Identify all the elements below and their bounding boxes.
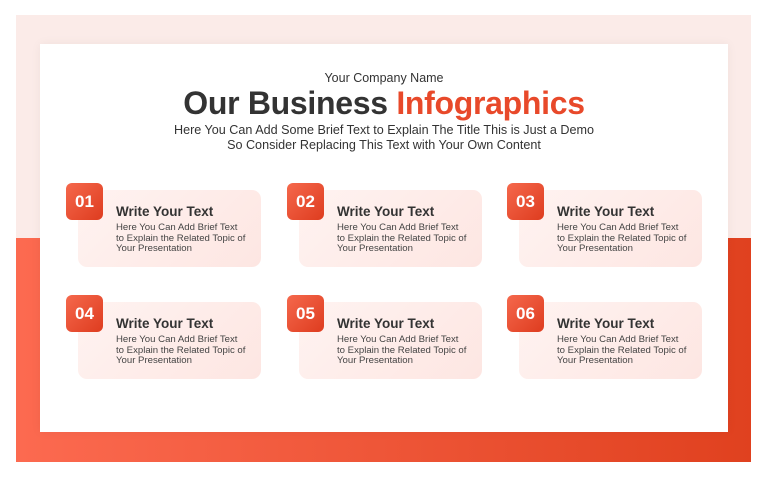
card 05: Here You Can Add Brief Text xyxy=(337,334,458,345)
card 04: Your Presentation xyxy=(116,355,192,366)
card 02: Your Presentation xyxy=(337,243,413,254)
badge 03: 03 xyxy=(516,192,535,211)
card 06: to Explain the Related Topic of xyxy=(557,344,686,356)
card 01: to Explain the Related Topic of xyxy=(116,232,245,244)
badge 04: 04 xyxy=(75,304,94,323)
card 04: to Explain the Related Topic of xyxy=(116,344,245,356)
subtitle: So Consider Replacing This Text with Your Own Content xyxy=(227,138,541,152)
badge 02: 02 xyxy=(296,192,315,211)
card 06: Here You Can Add Brief Text xyxy=(557,334,678,345)
card 01 xyxy=(78,190,261,267)
card 02: to Explain the Related Topic of xyxy=(337,232,466,244)
badge 06 xyxy=(507,295,544,332)
badge 02 xyxy=(287,183,324,220)
card 02: Here You Can Add Brief Text xyxy=(337,222,458,233)
card 04: Write Your Text xyxy=(116,316,213,331)
card 01: Here You Can Add Brief Text xyxy=(116,222,237,233)
background top xyxy=(16,15,751,239)
card 04 xyxy=(78,302,261,379)
card 03: Here You Can Add Brief Text xyxy=(557,222,678,233)
card 02 xyxy=(299,190,482,267)
background bottom xyxy=(16,238,751,462)
card 03: Your Presentation xyxy=(557,243,633,254)
card 05: Write Your Text xyxy=(337,316,434,331)
subtitle xyxy=(174,123,594,152)
card 05: to Explain the Related Topic of xyxy=(337,344,466,356)
card 03: to Explain the Related Topic of xyxy=(557,232,686,244)
card 05 xyxy=(299,302,482,379)
card 06: Your Presentation xyxy=(557,355,633,366)
badge 03 xyxy=(507,183,544,220)
title: Our Business Infographics xyxy=(183,85,585,121)
badge 01: 01 xyxy=(75,192,94,211)
card 03 xyxy=(519,190,702,267)
card 01: Your Presentation xyxy=(116,243,192,254)
badge 05 xyxy=(287,295,324,332)
company name: Your Company Name xyxy=(324,71,444,85)
white panel xyxy=(40,44,728,432)
badge 04 xyxy=(66,295,103,332)
card 06 xyxy=(519,302,702,379)
card 02: Write Your Text xyxy=(337,204,434,219)
card 06: Write Your Text xyxy=(557,316,654,331)
badge 01 xyxy=(66,183,103,220)
card 05: Your Presentation xyxy=(337,355,413,366)
card 01: Write Your Text xyxy=(116,204,213,219)
badge 06: 06 xyxy=(516,304,535,323)
badge 05: 05 xyxy=(296,304,315,323)
card 03: Write Your Text xyxy=(557,204,654,219)
card 04: Here You Can Add Brief Text xyxy=(116,334,237,345)
subtitle: Here You Can Add Some Brief Text to Explain The Title This is Just a Demo xyxy=(174,123,594,137)
